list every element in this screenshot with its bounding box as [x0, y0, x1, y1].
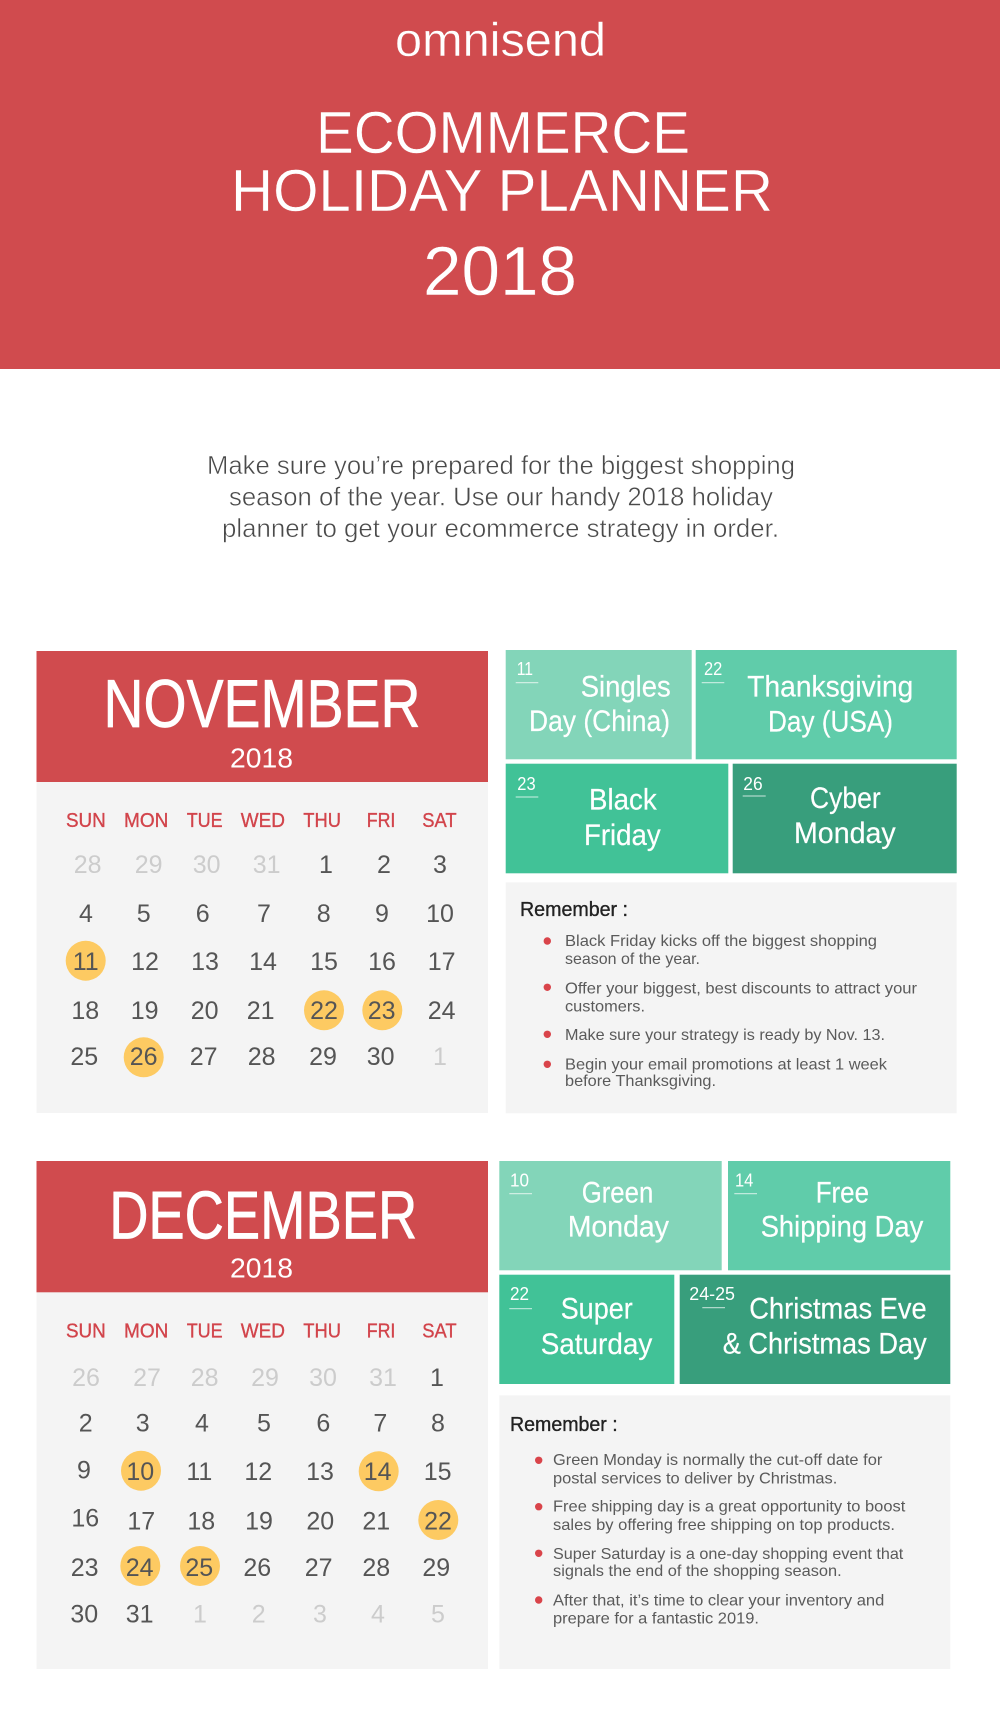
bullet text: Free shipping day is a great opportunity to boost [553, 1499, 906, 1516]
intro text: planner to get your ecommerce strategy in order. [222, 513, 779, 543]
date grid: 19 [131, 997, 159, 1025]
panel: December remember notes [499, 1395, 950, 1669]
bullet text: Offer your biggest, best discounts to attract your [565, 980, 918, 997]
bullet text [565, 933, 918, 1090]
date grid: 19 [245, 1507, 273, 1535]
date grid: 11 [73, 948, 99, 976]
card: Super Saturday: Saturday [541, 1328, 652, 1361]
card: Super Saturday: Super [561, 1292, 633, 1325]
date grid: 30 [367, 1043, 395, 1071]
date grid: 28 [191, 1364, 219, 1392]
month header: December: DECEMBER [109, 1177, 417, 1253]
date grid: 26 [130, 1043, 158, 1071]
bullet markers [535, 1457, 542, 1604]
card: Super Saturday: 22 [510, 1284, 529, 1304]
card: Singles Day: 11 [517, 659, 533, 679]
date grid: 26 [243, 1554, 271, 1582]
date grid: 3 [136, 1410, 150, 1438]
bullet text: customers. [565, 998, 645, 1015]
date grid: 7 [373, 1410, 387, 1438]
card: Christmas Eve and Christmas Day: Christmas Eve [749, 1292, 927, 1325]
date grid: 29 [309, 1043, 337, 1071]
bullet text: After that, it’s time to clear your inventory and [553, 1593, 884, 1610]
date grid: 29 [422, 1554, 450, 1582]
weekday labels: MON [124, 1320, 168, 1342]
date grid: 21 [247, 997, 275, 1025]
month header: December [36, 1161, 488, 1292]
card: Christmas Eve and Christmas Day: 24-25 [689, 1284, 735, 1304]
card: Black Friday [506, 764, 728, 873]
date grid: 27 [133, 1364, 161, 1392]
month header: November: NOVEMBER [104, 666, 420, 742]
date grid: 5 [137, 900, 151, 928]
weekday labels: THU [303, 810, 341, 832]
date grid: 16 [368, 948, 396, 976]
date grid: 16 [71, 1505, 99, 1533]
date grid: 12 [131, 948, 159, 976]
title [231, 100, 773, 224]
date grid: 31 [126, 1600, 154, 1628]
date grid: 12 [244, 1458, 272, 1486]
date grid: 23 [368, 997, 396, 1025]
date grid [70, 1364, 452, 1628]
weekday labels [66, 810, 457, 832]
weekday labels: THU [303, 1320, 341, 1342]
panel: December holiday cards [499, 1161, 950, 1384]
date grid: 4 [195, 1410, 209, 1438]
weekday labels: MON [124, 810, 168, 832]
bullet text [553, 1452, 906, 1627]
date grid: 27 [305, 1554, 333, 1582]
card: Singles Day: Day (China) [529, 705, 670, 738]
bullet text: Make sure your strategy is ready by Nov. 13. [565, 1027, 885, 1044]
bullet text: before Thanksgiving. [565, 1073, 716, 1090]
date grid: 3 [313, 1600, 327, 1628]
date grid: 28 [74, 851, 102, 879]
date grid: 28 [362, 1554, 390, 1582]
date grid: 14 [364, 1458, 392, 1486]
weekday labels: SUN [66, 810, 106, 832]
weekday labels: FRI [367, 1320, 395, 1342]
card: Free Shipping Day [728, 1161, 950, 1270]
date grid: 18 [187, 1507, 215, 1535]
heading: Remember: Remember : [520, 899, 628, 921]
card: Free Shipping Day: 14 [735, 1171, 753, 1191]
date grid: 14 [249, 948, 277, 976]
month header: December: 2018 [230, 1252, 293, 1284]
date grid [70, 851, 456, 1071]
bullet text: season of the year. [565, 951, 700, 968]
date grid: 15 [310, 948, 338, 976]
date grid: 10 [426, 900, 454, 928]
bullet text: Super Saturday is a one-day shopping event that [553, 1546, 904, 1563]
card: Thanksgiving Day [696, 650, 957, 759]
date grid: 30 [70, 1600, 98, 1628]
card: Singles Day [506, 650, 692, 759]
weekday labels: SAT [422, 1320, 457, 1342]
bullet text: postal services to deliver by Christmas. [553, 1470, 837, 1487]
date grid: 2 [377, 851, 391, 879]
bullet text: Green Monday is normally the cut-off date for [553, 1452, 883, 1469]
card: Thanksgiving Day: Day (USA) [768, 706, 893, 739]
date grid: 26 [72, 1364, 100, 1392]
date grid: 17 [428, 948, 456, 976]
date grid: 22 [424, 1507, 452, 1535]
date grid: 6 [196, 900, 210, 928]
card: Christmas Eve and Christmas Day [680, 1275, 950, 1384]
panel: December calendar [36, 1161, 488, 1669]
date grid: 23 [71, 1554, 99, 1582]
date grid: 1 [430, 1364, 444, 1392]
card: Cyber Monday: 26 [743, 774, 763, 794]
date grid: 9 [77, 1456, 91, 1484]
highlighted dates [66, 941, 402, 1077]
card: Green Monday: Monday [568, 1211, 669, 1244]
month header: November: 2018 [230, 742, 293, 774]
date grid: 13 [191, 948, 219, 976]
heading: Remember: Remember : [510, 1414, 618, 1436]
logo: omnisend: omnisend [395, 13, 606, 66]
date grid: 18 [71, 997, 99, 1025]
date grid: 31 [253, 851, 281, 879]
date grid: 11 [186, 1458, 212, 1486]
date grid: 4 [371, 1600, 385, 1628]
card: Christmas Eve and Christmas Day: & Christmas Day [723, 1327, 927, 1360]
date grid: 22 [310, 997, 338, 1025]
intro text: season of the year. Use our handy 2018 holiday [229, 482, 773, 512]
date grid: 20 [306, 1507, 334, 1535]
card: Free Shipping Day: Free [816, 1176, 869, 1209]
date grid: 1 [433, 1043, 447, 1071]
date grid: 10 [126, 1458, 154, 1486]
card: Green Monday [499, 1161, 722, 1270]
date grid: 24 [126, 1554, 154, 1582]
date grid: 28 [248, 1043, 276, 1071]
card: Singles Day: Singles [581, 671, 671, 704]
month header: November [36, 651, 488, 782]
card: Black Friday: Friday [584, 819, 661, 852]
date grid: 29 [251, 1364, 279, 1392]
bullet text: Black Friday kicks off the biggest shopping [565, 933, 877, 950]
date grid: 25 [70, 1043, 98, 1071]
weekday labels: SAT [422, 810, 457, 832]
bullet text: sales by offering free shipping on top products. [553, 1517, 895, 1534]
card: Thanksgiving Day: 22 [704, 659, 722, 679]
panel: November calendar [36, 651, 488, 1113]
bullet text: signals the end of the shopping season. [553, 1563, 842, 1580]
intro text: Make sure you’re prepared for the biggest shopping [207, 450, 795, 480]
date grid: 15 [424, 1458, 452, 1486]
date grid: 5 [431, 1600, 445, 1628]
date grid: 17 [127, 1507, 155, 1535]
date grid: 29 [135, 851, 163, 879]
card: Black Friday: Black [589, 783, 658, 816]
weekday labels: FRI [367, 810, 395, 832]
panel: header banner [0, 0, 1000, 369]
card: Green Monday: 10 [510, 1171, 529, 1191]
date grid: 3 [433, 851, 447, 879]
weekday labels: TUE [187, 810, 223, 832]
card: Super Saturday [499, 1275, 674, 1384]
card: Green Monday: Green [582, 1176, 653, 1209]
date grid: 7 [257, 900, 271, 928]
date grid: 6 [316, 1410, 330, 1438]
panel: November holiday cards [506, 650, 957, 873]
weekday labels: WED [241, 810, 285, 832]
date grid: 13 [306, 1458, 334, 1486]
highlighted dates [120, 1451, 458, 1586]
card: Cyber Monday: Monday [794, 817, 896, 850]
date grid: 1 [193, 1600, 207, 1628]
bullet text: Begin your email promotions at least 1 week [565, 1056, 888, 1073]
card: Cyber Monday [733, 764, 957, 873]
date grid: 8 [431, 1410, 445, 1438]
card: Thanksgiving Day: Thanksgiving [747, 671, 913, 704]
date grid: 2 [79, 1410, 93, 1438]
date grid: 5 [257, 1410, 271, 1438]
date grid: 30 [193, 851, 221, 879]
weekday labels: WED [241, 1320, 285, 1342]
bullet text: prepare for a fantastic 2019. [553, 1610, 759, 1627]
date grid: 25 [185, 1554, 213, 1582]
card: Cyber Monday: Cyber [810, 782, 881, 815]
date grid: 24 [428, 997, 456, 1025]
date grid: 1 [319, 851, 333, 879]
date grid: 9 [375, 900, 389, 928]
panel: November remember notes [506, 882, 957, 1113]
weekday labels [66, 1320, 457, 1342]
card: Free Shipping Day: Shipping Day [761, 1211, 923, 1244]
date grid: 27 [190, 1043, 218, 1071]
date grid: 2 [252, 1600, 266, 1628]
date grid: 31 [369, 1364, 397, 1392]
card: Black Friday: 23 [517, 774, 536, 794]
date grid: 30 [309, 1364, 337, 1392]
bullet markers [544, 937, 551, 1068]
date grid: 21 [362, 1507, 390, 1535]
weekday labels: TUE [187, 1320, 223, 1342]
year: 2018 [423, 232, 577, 310]
title: HOLIDAY PLANNER [231, 158, 773, 224]
weekday labels: SUN [66, 1320, 106, 1342]
date grid: 8 [317, 900, 331, 928]
title: ECOMMERCE [316, 100, 690, 166]
date grid: 4 [79, 900, 93, 928]
intro text [207, 450, 795, 543]
date grid: 20 [191, 997, 219, 1025]
